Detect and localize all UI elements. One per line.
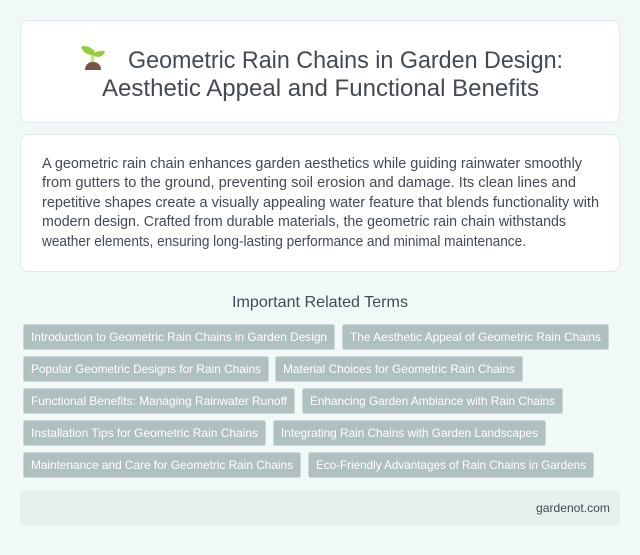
tag: material choices: Material Choices for Geometric Rain Chains — [283, 362, 515, 376]
icon: seedling — [81, 46, 105, 70]
description text: from gutters to the ground, preventing soil erosion and damage. Its clean lines and — [42, 175, 576, 191]
panel: description card — [20, 134, 620, 272]
panel: title card — [20, 20, 620, 122]
tag: material choices — [276, 356, 522, 382]
tag: garden ambiance — [302, 388, 562, 414]
description text: A geometric rain chain enhances garden aesthetics while guiding rainwater smoothly — [42, 156, 583, 172]
title text: Aesthetic Appeal and Functional Benefits — [102, 75, 539, 102]
tag: popular designs — [24, 356, 268, 382]
tag: functional benefits — [24, 388, 294, 414]
tag: eco-friendly advantages — [308, 452, 594, 478]
tag: maintenance and care — [24, 452, 300, 478]
title text — [102, 47, 563, 102]
tag: introduction — [24, 324, 334, 350]
description text: modern design. Crafted from durable materials, the geometric rain chain withstands — [42, 214, 566, 230]
footer source text: gardenot.com — [536, 501, 610, 515]
title text: Geometric Rain Chains in Garden Design: — [128, 47, 563, 74]
description text: repetitive shapes create a visually appealing water feature that blends functionality with — [42, 195, 599, 211]
footer bar — [20, 491, 620, 525]
tag: eco-friendly advantages: Eco-Friendly Advantages of Rain Chains in Gardens — [316, 458, 586, 472]
tag: integrating landscapes — [274, 420, 546, 446]
panel: related term tags — [24, 324, 608, 478]
description text — [41, 156, 599, 250]
tag: aesthetic appeal — [342, 324, 608, 350]
tag: installation tips — [24, 420, 266, 446]
tag: garden ambiance: Enhancing Garden Ambiance with Rain Chains — [310, 394, 555, 408]
tag: introduction: Introduction to Geometric Rain Chains in Garden Design — [31, 330, 327, 344]
heading: important related terms: Important Related Terms — [232, 294, 408, 311]
tag: functional benefits: Functional Benefits: Managing Rainwater Runoff — [31, 394, 288, 408]
tag: installation tips: Installation Tips for Geometric Rain Chains — [31, 426, 258, 440]
description text: weather elements, ensuring long-lasting performance and minimal maintenance. — [41, 234, 526, 250]
tag: popular designs: Popular Geometric Designs for Rain Chains — [31, 362, 261, 376]
tag: aesthetic appeal: The Aesthetic Appeal of Geometric Rain Chains — [350, 330, 601, 344]
tag: maintenance and care: Maintenance and Care for Geometric Rain Chains — [31, 458, 293, 472]
tag: integrating landscapes: Integrating Rain Chains with Garden Landscapes — [281, 426, 538, 440]
